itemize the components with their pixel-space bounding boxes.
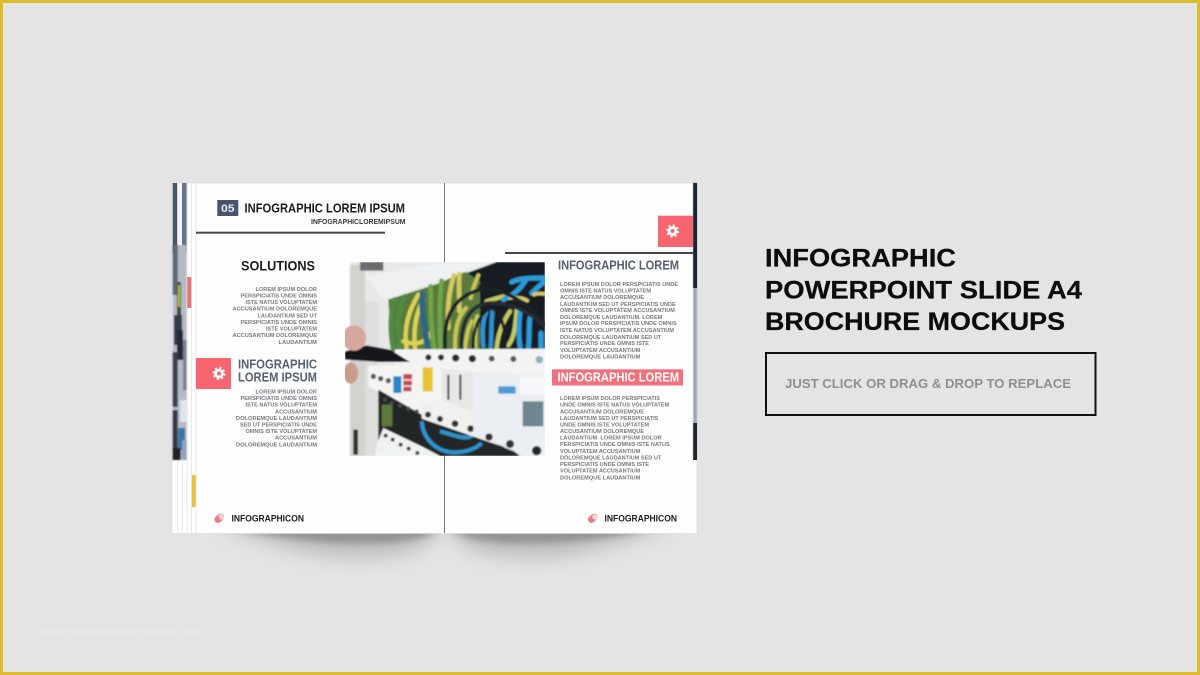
main title: BROCHURE MOCKUPS [765, 308, 1065, 336]
left section text: ISTE NATUS VOLUPTATEM [246, 403, 317, 409]
left section text: DOLOREMQUE LAUDANTIUM [236, 416, 317, 422]
left section heading: INFOGRAPHIC [238, 357, 317, 371]
left section text: PERSPICIATIS UNDE OMNIS [240, 396, 317, 402]
spine line [444, 183, 445, 533]
right text block 1: PERSPICIATIS UNDE OMNIS ISTE [560, 341, 649, 347]
pink gear tab left [196, 358, 231, 389]
right heading 1: INFOGRAPHIC LOREM [558, 258, 679, 272]
right text block 1: DOLOREMQUE LAUDANTIUM [560, 355, 641, 361]
right text block 1: DOLOREMQUE LAUDANTIUM. LOREM [560, 315, 663, 321]
right text block 1: OMNIS ISTE NATUS VOLUPTATEM [560, 288, 651, 294]
watermark: www.heritagechristiancollege.com [39, 626, 200, 637]
right text block 2: VOLUPTATEM ACCUSANTIUM [560, 469, 641, 475]
header title: INFOGRAPHIC LOREM IPSUM [244, 202, 405, 216]
solutions text: LOREM IPSUM DOLOR [256, 287, 317, 293]
right text block 2: LAUDANTIUM. LOREM IPSUM DOLOR [560, 436, 662, 442]
left section heading [238, 357, 317, 385]
right text block 2: UNDE OMNIS ISTE NATUS VOLUPTATEM [560, 403, 670, 409]
solutions text: PERSPICIATIS UNDE OMNIS [240, 294, 317, 300]
left section text: SED UT PERSPICIATIS UNDE [240, 423, 317, 429]
brand footer left: INFOGRAPHICON [232, 514, 304, 524]
main title: INFOGRAPHIC [765, 245, 956, 273]
right text block 1: LAUDANTIUM SED UT PERSPICIATIS UNDE [560, 302, 676, 308]
brand footer left [213, 512, 304, 524]
right text block 2: DOLOREMQUE LAUDANTIUM [560, 475, 641, 481]
right text block 2: VOLUPTATEM ACCUSANTIUM [560, 449, 641, 455]
left section text: LOREM IPSUM DOLOR [256, 390, 317, 396]
solutions text [232, 287, 318, 346]
right text block 1 [560, 282, 678, 361]
solutions text: ACCUSANTIUM DOLOREMQUE [232, 333, 317, 339]
right text block 2: LAUDANTIUM SED UT PERSPICIATIS [560, 416, 659, 422]
solutions text: ACCUSANTIUM DOLOREMQUE [232, 307, 317, 313]
left section text: ACCUSANTIUM [275, 436, 317, 442]
main title [765, 245, 1082, 336]
call-to-action box [766, 353, 1096, 415]
left section text: ACCUSANTIUM [275, 409, 317, 415]
pink gear tab right [658, 216, 693, 247]
right text block 1: VOLUPTATEM ACCUSANTIUM [560, 348, 641, 354]
header subtitle: INFOGRAPHICLOREMIPSUM [311, 219, 406, 226]
page sheet [172, 183, 697, 534]
left section text [236, 390, 317, 448]
solutions text: LAUDANTIUM [278, 340, 317, 346]
right header rule [505, 252, 693, 254]
right text block 1: DOLOREMQUE LAUDANTIUM SED UT [560, 335, 662, 341]
solutions text: ISTE VOLUPTATEM [266, 326, 317, 332]
right text block 2: ACCUSANTIUM DOLOREMQUE [560, 409, 644, 415]
solutions text: PERSPICIATIS UNDE OMNIS [240, 320, 317, 326]
pink heading label: INFOGRAPHIC LOREM [558, 371, 679, 385]
left section text: DOLOREMQUE LAUDANTIUM [236, 442, 317, 448]
right text block 1: LOREM IPSUM DOLOR PERSPICIATIS UNDE [560, 282, 678, 288]
left section heading: LOREM IPSUM [238, 371, 317, 385]
right text block 2: UNDE OMNIS ISTE VOLUPTATEM [560, 423, 649, 429]
solutions heading: SOLUTIONS [241, 259, 315, 274]
right text block 2: PERSPICIATIS UNDE OMNIS ISTE [560, 462, 649, 468]
right text block 1: IPSUM DOLOR PERSPICIATIS UNDE OMNIS [560, 321, 677, 327]
brochure [172, 183, 697, 534]
left section text: OMNIS ISTE VOLUPTATEM [246, 429, 317, 435]
call-to-action box: JUST CLICK OR DRAG & DROP TO REPLACE [785, 376, 1071, 391]
brochure shadow [230, 534, 660, 564]
header number badge [217, 200, 238, 216]
right text block 2: PERSPICIATIS UNDE OMNIS ISTE NATUS [560, 442, 670, 448]
right text block 1: ISTE NATUS VOLUPTATEM ACCUSANTIUM [560, 328, 674, 334]
right text block 1: OMNIS ISTE VOLUPTATEM ACCUSANTIUM [560, 308, 675, 314]
solutions text: LAUDANTIUM SED UT [258, 314, 318, 320]
header rule [196, 232, 385, 234]
main title: POWERPOINT SLIDE A4 [765, 276, 1082, 304]
brand footer right [587, 512, 677, 524]
left stacked page edges [173, 183, 196, 533]
header number badge: 05 [221, 203, 234, 215]
brand footer right: INFOGRAPHICON [604, 514, 677, 524]
photo: electrical panel wiring [345, 262, 545, 456]
right text block 2: LOREM IPSUM DOLOR PERSPICIATIS [560, 396, 660, 402]
right text block 2 [560, 396, 670, 481]
right text block 1: ACCUSANTIUM DOLOREMQUE [560, 295, 644, 301]
solutions text: ISTE NATUS VOLUPTATEM [246, 300, 317, 306]
right page edge [693, 183, 697, 460]
right text block 2: DOLOREMQUE LAUDANTIUM SED UT [560, 456, 662, 462]
right text block 2: ACCUSANTIUM DOLOREMQUE [560, 429, 644, 435]
